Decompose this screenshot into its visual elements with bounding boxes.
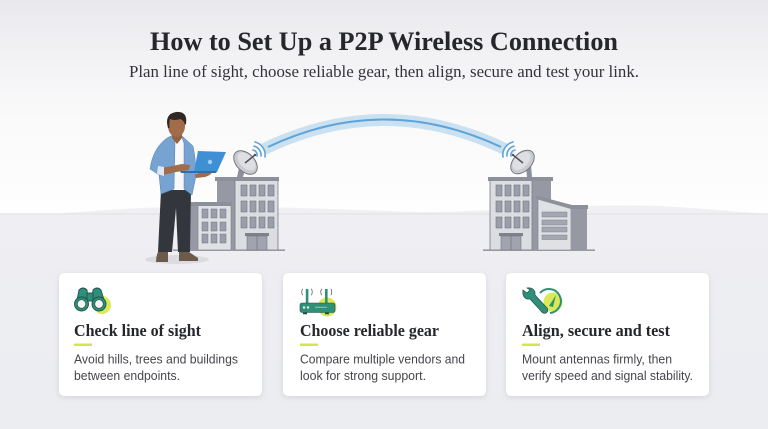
body text bbox=[300, 352, 465, 383]
forearm bbox=[162, 164, 190, 175]
tall building bbox=[215, 177, 279, 250]
panel: choose reliable gear bbox=[283, 273, 486, 396]
person with laptop bbox=[145, 112, 226, 264]
heading: Check line of sight bbox=[74, 321, 201, 340]
icon: binoculars bbox=[74, 288, 111, 314]
hair bbox=[167, 112, 186, 128]
body text: look for strong support. bbox=[300, 369, 426, 383]
body text bbox=[522, 352, 693, 383]
left building group bbox=[173, 142, 285, 251]
trousers bbox=[158, 190, 191, 252]
subtitle: Plan line of sight, choose reliable gear, then align, secure and test your link. bbox=[129, 62, 639, 81]
background sky bbox=[0, 0, 768, 215]
heading: Align, secure and test bbox=[522, 321, 670, 340]
cuff bbox=[157, 166, 164, 176]
panel: align, secure and test bbox=[506, 273, 709, 396]
icon: wrench and gauge bbox=[523, 288, 562, 313]
signal waves right bbox=[503, 142, 515, 157]
ground line bbox=[483, 250, 595, 251]
satellite dish right bbox=[506, 146, 539, 178]
body text: verify speed and signal stability. bbox=[522, 369, 693, 383]
signal waves left bbox=[253, 142, 265, 157]
satellite dish left bbox=[229, 146, 262, 179]
neck bbox=[172, 130, 182, 144]
tall building bbox=[488, 177, 553, 250]
laptop bbox=[180, 151, 226, 173]
background ground and hills bbox=[0, 205, 768, 429]
annex building bbox=[536, 196, 588, 250]
t-shirt bbox=[173, 141, 185, 189]
panel: check line of sight bbox=[59, 273, 262, 396]
body text: Compare multiple vendors and bbox=[300, 352, 465, 366]
ground shadow bbox=[145, 255, 209, 264]
hand on laptop bbox=[195, 170, 213, 178]
heading: Choose reliable gear bbox=[300, 321, 439, 340]
right building group bbox=[483, 142, 595, 251]
title: How to Set Up a P2P Wireless Connection bbox=[150, 26, 618, 56]
body text bbox=[74, 352, 238, 383]
ground line bbox=[173, 250, 285, 251]
accent line bbox=[74, 344, 92, 346]
body text: Mount antennas firmly, then bbox=[522, 352, 672, 366]
body text: between endpoints. bbox=[74, 369, 180, 383]
wireless link arc bbox=[264, 120, 505, 149]
head bbox=[168, 115, 185, 137]
accent line bbox=[522, 344, 540, 346]
body text: Avoid hills, trees and buildings bbox=[74, 352, 238, 366]
accent line bbox=[300, 344, 318, 346]
shoes bbox=[156, 252, 198, 262]
icon: router bbox=[300, 289, 336, 316]
denim shirt bbox=[150, 135, 175, 194]
small building bbox=[190, 202, 232, 250]
